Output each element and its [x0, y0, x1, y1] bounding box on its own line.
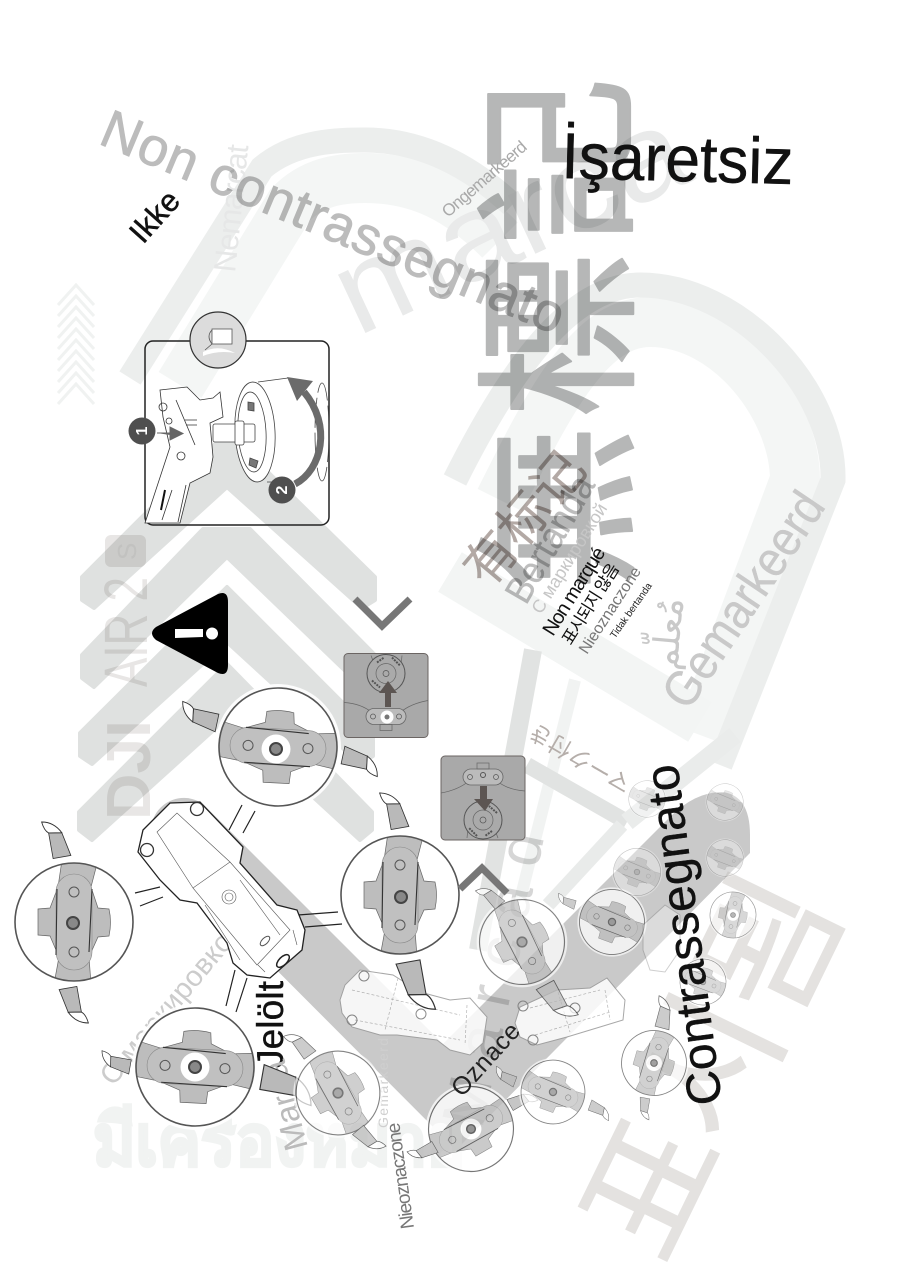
- propeller: faded F2: [407, 1067, 538, 1191]
- faint stacked chevrons: [58, 285, 94, 404]
- AIR 2S faded logo: S: [112, 543, 142, 560]
- word: Japanese marked: マーク付き: [521, 716, 638, 803]
- word: Contrassegnato: Contrassegnato: [636, 761, 733, 1108]
- word: Chinese marked: 有标记: [442, 432, 600, 600]
- AIR 2S faded logo: DJI: [95, 720, 164, 820]
- propeller: faded F11: [705, 887, 761, 943]
- propeller: faded F6: [611, 996, 697, 1120]
- large CJK: unmarked: 無標記: [426, 77, 669, 592]
- step 1 arrow: [157, 427, 183, 440]
- word: Non marque: Non marqué: [539, 543, 610, 640]
- panel: motor mounting instruction: [128, 312, 329, 525]
- propeller: faded F12: [672, 951, 734, 1013]
- word: Bertanda: Bertanda: [497, 468, 604, 610]
- word: Nieoznaczone lower: Nieoznaczone: [383, 1121, 419, 1230]
- heart watermark outline: [130, 140, 833, 950]
- step 2 badge: 2: [274, 485, 291, 494]
- word: Korean unmarked: 표시되지 않음: [558, 560, 623, 648]
- propeller: faded F5: [555, 878, 656, 966]
- panel frame: [145, 341, 329, 525]
- drone body: [138, 802, 305, 978]
- word: Tidak bertanda: Tidak bertanda: [608, 581, 655, 641]
- dark check-mark band: [151, 792, 750, 1150]
- word: Nemarcat: Nemarcat: [207, 142, 255, 274]
- drone arms: [135, 805, 342, 1012]
- word: Marca lower: Marca: [255, 1056, 315, 1155]
- word: marca: marca: [311, 79, 708, 361]
- propeller: unmarked, left: [11, 818, 137, 1027]
- word: Gemarkeerd faint: Gemarkeerd: [375, 1038, 391, 1128]
- panel header icon: [190, 312, 246, 368]
- step 1 badge: 1: [134, 426, 151, 435]
- arrow: down chevron: [355, 599, 410, 626]
- word: Arabic marked: مُعلّم: [637, 595, 692, 672]
- step 2 curved arrow: [287, 377, 321, 484]
- mini panel: attach marked motor: [344, 654, 428, 738]
- drone details: [140, 802, 297, 972]
- Thai watermark: มีเครื่องหมาย: [93, 1091, 465, 1180]
- arrow: up chevron: [460, 868, 507, 893]
- arms and blade from right propeller: [396, 959, 436, 1015]
- word: Ongemarkeerd: Ongemarkeerd: [438, 137, 531, 221]
- AIR 2S faded logo: AIR 2: [92, 577, 160, 687]
- drone: faded center: [340, 970, 487, 1055]
- motor drum: [213, 378, 329, 483]
- word: Russian marked large: С маркировкой: [94, 914, 250, 1091]
- drone: faded right: [515, 978, 625, 1045]
- large gray chevrons: [79, 432, 375, 840]
- propeller: faded F1: [277, 1026, 399, 1158]
- word: Marcado slanted: Marcad: [429, 825, 557, 1133]
- word: Jelolt: Jelölt: [250, 980, 291, 1068]
- faded step: drones and propellers: [277, 774, 761, 1191]
- propeller: faded F3: [461, 881, 583, 1027]
- propeller: unmarked, right: [337, 789, 463, 958]
- propeller: faded F4: [492, 1048, 613, 1136]
- word: Ikke: Ikke: [122, 183, 187, 250]
- word: Non contrassegnato: Non contrassegnato: [92, 99, 574, 346]
- word: Isaretsiz: İşaretsiz: [561, 119, 794, 198]
- mini panel: attach unmarked motor: [441, 756, 525, 840]
- word: Nieoznaczone top: Nieoznaczone: [576, 564, 645, 657]
- faded back drone and propellers: [605, 774, 750, 972]
- propeller: marked, bottom: [99, 1001, 317, 1133]
- propeller arm: [145, 387, 223, 523]
- drone: marked top view: [135, 802, 342, 1012]
- warning icon: [152, 593, 228, 674]
- word: Oznace: Oznace: [446, 1017, 526, 1102]
- step 2 badge: [268, 476, 296, 504]
- word: Russian marked small: С маркировкой: [527, 500, 611, 617]
- step 1 badge: [128, 418, 156, 444]
- AIR 2S faded logo: [92, 535, 164, 820]
- propeller: marked, top: [178, 681, 382, 813]
- word: Gemarkeerd: Gemarkeerd: [651, 481, 836, 718]
